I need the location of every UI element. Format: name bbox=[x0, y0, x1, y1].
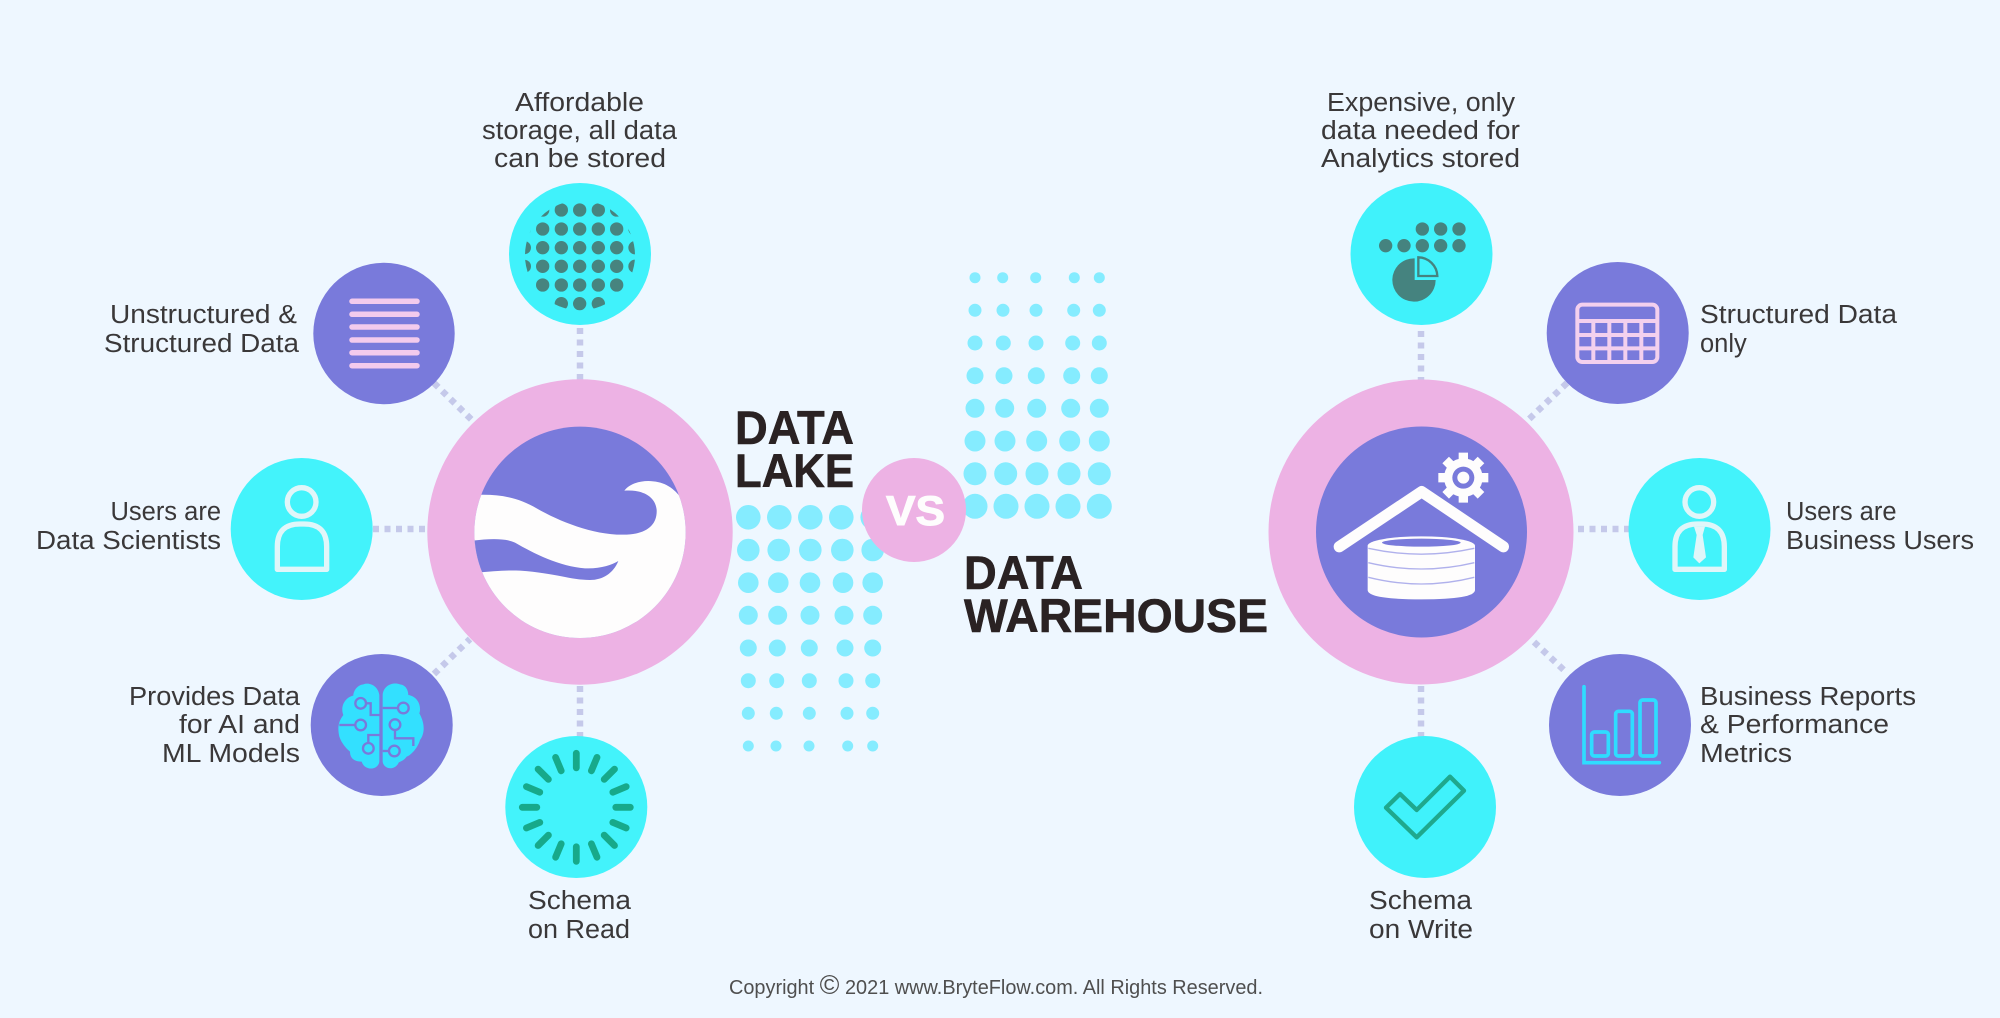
label: schema on read: on Read bbox=[528, 916, 630, 944]
label: structured only: Structured Data bbox=[1700, 301, 1898, 329]
label: expensive storage bbox=[1321, 89, 1521, 173]
label: expensive storage: data needed for bbox=[1321, 117, 1521, 145]
dot matrix: data warehouse bbox=[962, 272, 1112, 519]
label: schema on read bbox=[528, 887, 632, 944]
purple disc bbox=[1316, 426, 1527, 638]
label: business reports: & Performance bbox=[1700, 711, 1889, 739]
icon: warehouse roof, gear and database bbox=[1339, 453, 1503, 599]
label: affordable storage bbox=[482, 89, 678, 173]
label: data scientists: Data Scientists bbox=[36, 527, 221, 555]
node: AI and ML bbox=[311, 654, 453, 796]
icon: person bbox=[277, 488, 327, 569]
title: data warehouse: WAREHOUSE bbox=[964, 589, 1268, 642]
dot matrix: data lake bbox=[736, 505, 885, 752]
label: business users: Business Users bbox=[1786, 527, 1974, 555]
icon: lake wave bbox=[474, 426, 686, 638]
label: AI and ML models: Provides Data bbox=[129, 683, 301, 711]
label: business reports: Metrics bbox=[1700, 740, 1792, 768]
icon: spinner bbox=[522, 753, 630, 861]
label: business users: Users are bbox=[1786, 498, 1897, 526]
title: data lake: LAKE bbox=[735, 444, 854, 497]
vs badge bbox=[862, 458, 966, 562]
icon: text lines bbox=[352, 301, 417, 366]
node: unstructured data bbox=[313, 263, 455, 404]
label: AI and ML models: for AI and bbox=[179, 711, 300, 739]
label: business reports: Business Reports bbox=[1700, 683, 1916, 711]
icon: table bbox=[1577, 305, 1657, 362]
icon: bar chart bbox=[1584, 687, 1659, 763]
vs badge: VS bbox=[886, 487, 945, 534]
pink ring bbox=[427, 379, 733, 685]
label: schema on write: on Write bbox=[1369, 916, 1473, 944]
label: schema on write: Schema bbox=[1369, 887, 1473, 915]
pink ring bbox=[1268, 380, 1574, 684]
node: storage grid bbox=[509, 183, 651, 325]
label: schema on read: Schema bbox=[528, 887, 632, 915]
label: business users bbox=[1786, 498, 1974, 555]
label: affordable storage: can be stored bbox=[494, 145, 666, 173]
icon: check mark bbox=[1386, 777, 1464, 837]
node: business reports bbox=[1549, 654, 1691, 796]
label: structured only: only bbox=[1700, 330, 1747, 358]
title: data lake bbox=[735, 401, 854, 497]
label: expensive storage: Expensive, only bbox=[1327, 89, 1515, 117]
label: expensive storage: Analytics stored bbox=[1321, 145, 1520, 173]
copyright: Copyright © 2021 www.BryteFlow.com. All Rights Reserved. bbox=[729, 970, 1263, 1000]
label: affordable storage: storage, all data bbox=[482, 117, 678, 145]
label: schema on write bbox=[1369, 887, 1473, 944]
label: unstructured and structured: Unstructured & bbox=[110, 301, 297, 329]
node: data scientists bbox=[231, 458, 373, 600]
label: AI and ML models bbox=[129, 683, 301, 768]
label: business reports bbox=[1700, 683, 1916, 768]
label: unstructured and structured: Structured Data bbox=[104, 330, 300, 358]
node: schema on write bbox=[1354, 736, 1496, 878]
icon: brain circuit bbox=[338, 683, 424, 769]
hub: data warehouse bbox=[1268, 380, 1574, 684]
label: data scientists bbox=[36, 498, 221, 555]
icon: dot globe bbox=[525, 203, 635, 310]
node: business users bbox=[1628, 458, 1770, 600]
label: data scientists: Users are bbox=[110, 498, 221, 526]
icon: dots and pie chart bbox=[1379, 222, 1466, 302]
title: data warehouse bbox=[964, 546, 1268, 642]
node: structured data bbox=[1547, 262, 1689, 404]
title: data lake: DATA bbox=[735, 401, 854, 454]
label: structured only bbox=[1700, 301, 1898, 358]
connectors: dotted lines bbox=[373, 328, 1630, 738]
hub: data lake bbox=[427, 379, 733, 685]
node: expensive analytics bbox=[1350, 183, 1492, 325]
label: affordable storage: Affordable bbox=[515, 89, 644, 117]
label: unstructured and structured bbox=[104, 301, 300, 358]
node: schema on read bbox=[505, 736, 647, 878]
title: data warehouse: DATA bbox=[964, 546, 1083, 599]
icon: person with tie bbox=[1675, 488, 1724, 569]
label: AI and ML models: ML Models bbox=[162, 740, 300, 768]
